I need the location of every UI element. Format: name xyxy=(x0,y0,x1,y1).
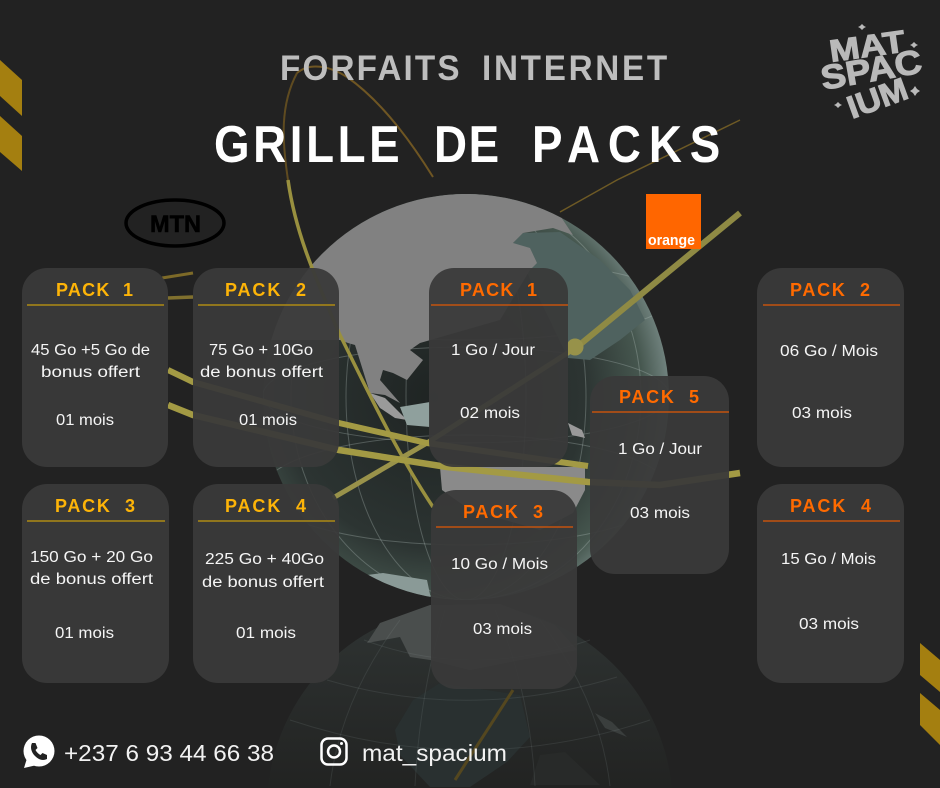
panel: Orange pack 5: 1 Go / Jour xyxy=(618,441,702,458)
panel: Orange pack 1: 02 mois xyxy=(460,405,520,422)
panel: Orange pack 2: PACK 2 xyxy=(790,280,870,300)
contact: instagram handle: mat_spacium xyxy=(362,740,507,766)
panel: Orange pack 4 xyxy=(757,484,904,683)
decoration: gold chevrons top left xyxy=(0,60,22,171)
panel: MTN pack 2: de bonus offert xyxy=(200,364,324,381)
logo: mat spacium: IUM xyxy=(842,71,913,126)
panel: Orange pack 2: 03 mois xyxy=(792,405,852,422)
logo: orange xyxy=(646,194,701,249)
panel: Orange pack 4: PACK 4 xyxy=(790,496,871,516)
panel: Orange pack 1 xyxy=(429,268,568,467)
panel: Orange pack 5: 03 mois xyxy=(630,505,690,522)
title: forfaits internet: INTERNET xyxy=(482,49,667,88)
icon: instagram xyxy=(322,738,346,764)
title: grille de packs xyxy=(214,116,720,174)
panel: MTN pack 1: 01 mois xyxy=(56,412,114,429)
panel: MTN pack 3: 01 mois xyxy=(55,625,114,642)
panel: MTN pack 3: PACK 3 xyxy=(55,496,135,516)
title: grille de packs: GRILLE xyxy=(214,116,400,174)
panel: Orange pack 3: 03 mois xyxy=(473,621,532,638)
panel: MTN pack 2: 75 Go + 10Go xyxy=(209,342,313,359)
panel: MTN pack 3 xyxy=(22,484,169,683)
panel: Orange pack 2: 06 Go / Mois xyxy=(780,343,878,360)
panel: MTN pack 4: 225 Go + 40Go xyxy=(205,551,324,568)
logo: mat spacium: MAT xyxy=(827,24,907,69)
panel: MTN pack 2: PACK 2 xyxy=(225,280,306,300)
panel: MTN pack 1: PACK 1 xyxy=(56,280,133,300)
panel: Orange pack 1: PACK 1 xyxy=(460,280,537,300)
logo: mat spacium xyxy=(818,24,925,126)
globe: northern land mass xyxy=(309,194,573,403)
logo: orange: orange xyxy=(648,232,695,249)
panel: MTN pack 1: 45 Go +5 Go de xyxy=(31,342,150,359)
panel: Orange pack 1: 1 Go / Jour xyxy=(451,342,535,359)
title: grille de packs: DE xyxy=(434,116,499,174)
panel: Orange pack 3: 10 Go / Mois xyxy=(451,556,548,573)
panel: Orange pack 3 xyxy=(431,490,577,689)
panel: MTN pack 3: 150 Go + 20 Go xyxy=(30,549,153,566)
title: grille de packs: PACKS xyxy=(532,116,720,174)
panel: Orange pack 4: 03 mois xyxy=(799,616,859,633)
panel: MTN pack 4 xyxy=(193,484,339,683)
panel: Orange pack 4: 15 Go / Mois xyxy=(781,551,876,568)
contact: phone number: +237 6 93 44 66 38 xyxy=(64,740,274,766)
globe: teal ocean region xyxy=(513,232,645,360)
panel: MTN pack 1 xyxy=(22,268,168,467)
panel: MTN pack 4: de bonus offert xyxy=(202,574,325,591)
logo: MTN xyxy=(126,200,224,246)
panel: Orange pack 2 xyxy=(757,268,904,467)
icon: whatsapp xyxy=(24,736,54,768)
panel: Orange pack 5 xyxy=(590,376,729,574)
panel: MTN pack 3: de bonus offert xyxy=(30,571,154,588)
reflected globe xyxy=(268,604,672,788)
logo: mat spacium: SPAC xyxy=(818,43,925,98)
panel: MTN pack 4: 01 mois xyxy=(236,625,296,642)
panel: MTN pack 4: PACK 4 xyxy=(225,496,306,516)
globe: islands xyxy=(370,393,407,420)
panel: Orange pack 3: PACK 3 xyxy=(463,502,543,522)
orbit node xyxy=(566,338,584,356)
decoration: gold chevrons bottom right xyxy=(920,643,940,745)
panel: Orange pack 5: PACK 5 xyxy=(619,387,699,407)
globe xyxy=(276,194,668,597)
title: forfaits internet: FORFAITS xyxy=(280,49,460,88)
panel: MTN pack 2: 01 mois xyxy=(239,412,297,429)
panel: MTN pack 2 xyxy=(193,268,339,467)
logo: MTN: MTN xyxy=(150,211,201,238)
globe: southern land mass xyxy=(440,467,585,508)
orbit lines xyxy=(162,66,740,507)
panel: MTN pack 1: bonus offert xyxy=(41,364,141,381)
globe: lower rim land xyxy=(368,573,430,597)
title: forfaits internet xyxy=(280,49,667,88)
